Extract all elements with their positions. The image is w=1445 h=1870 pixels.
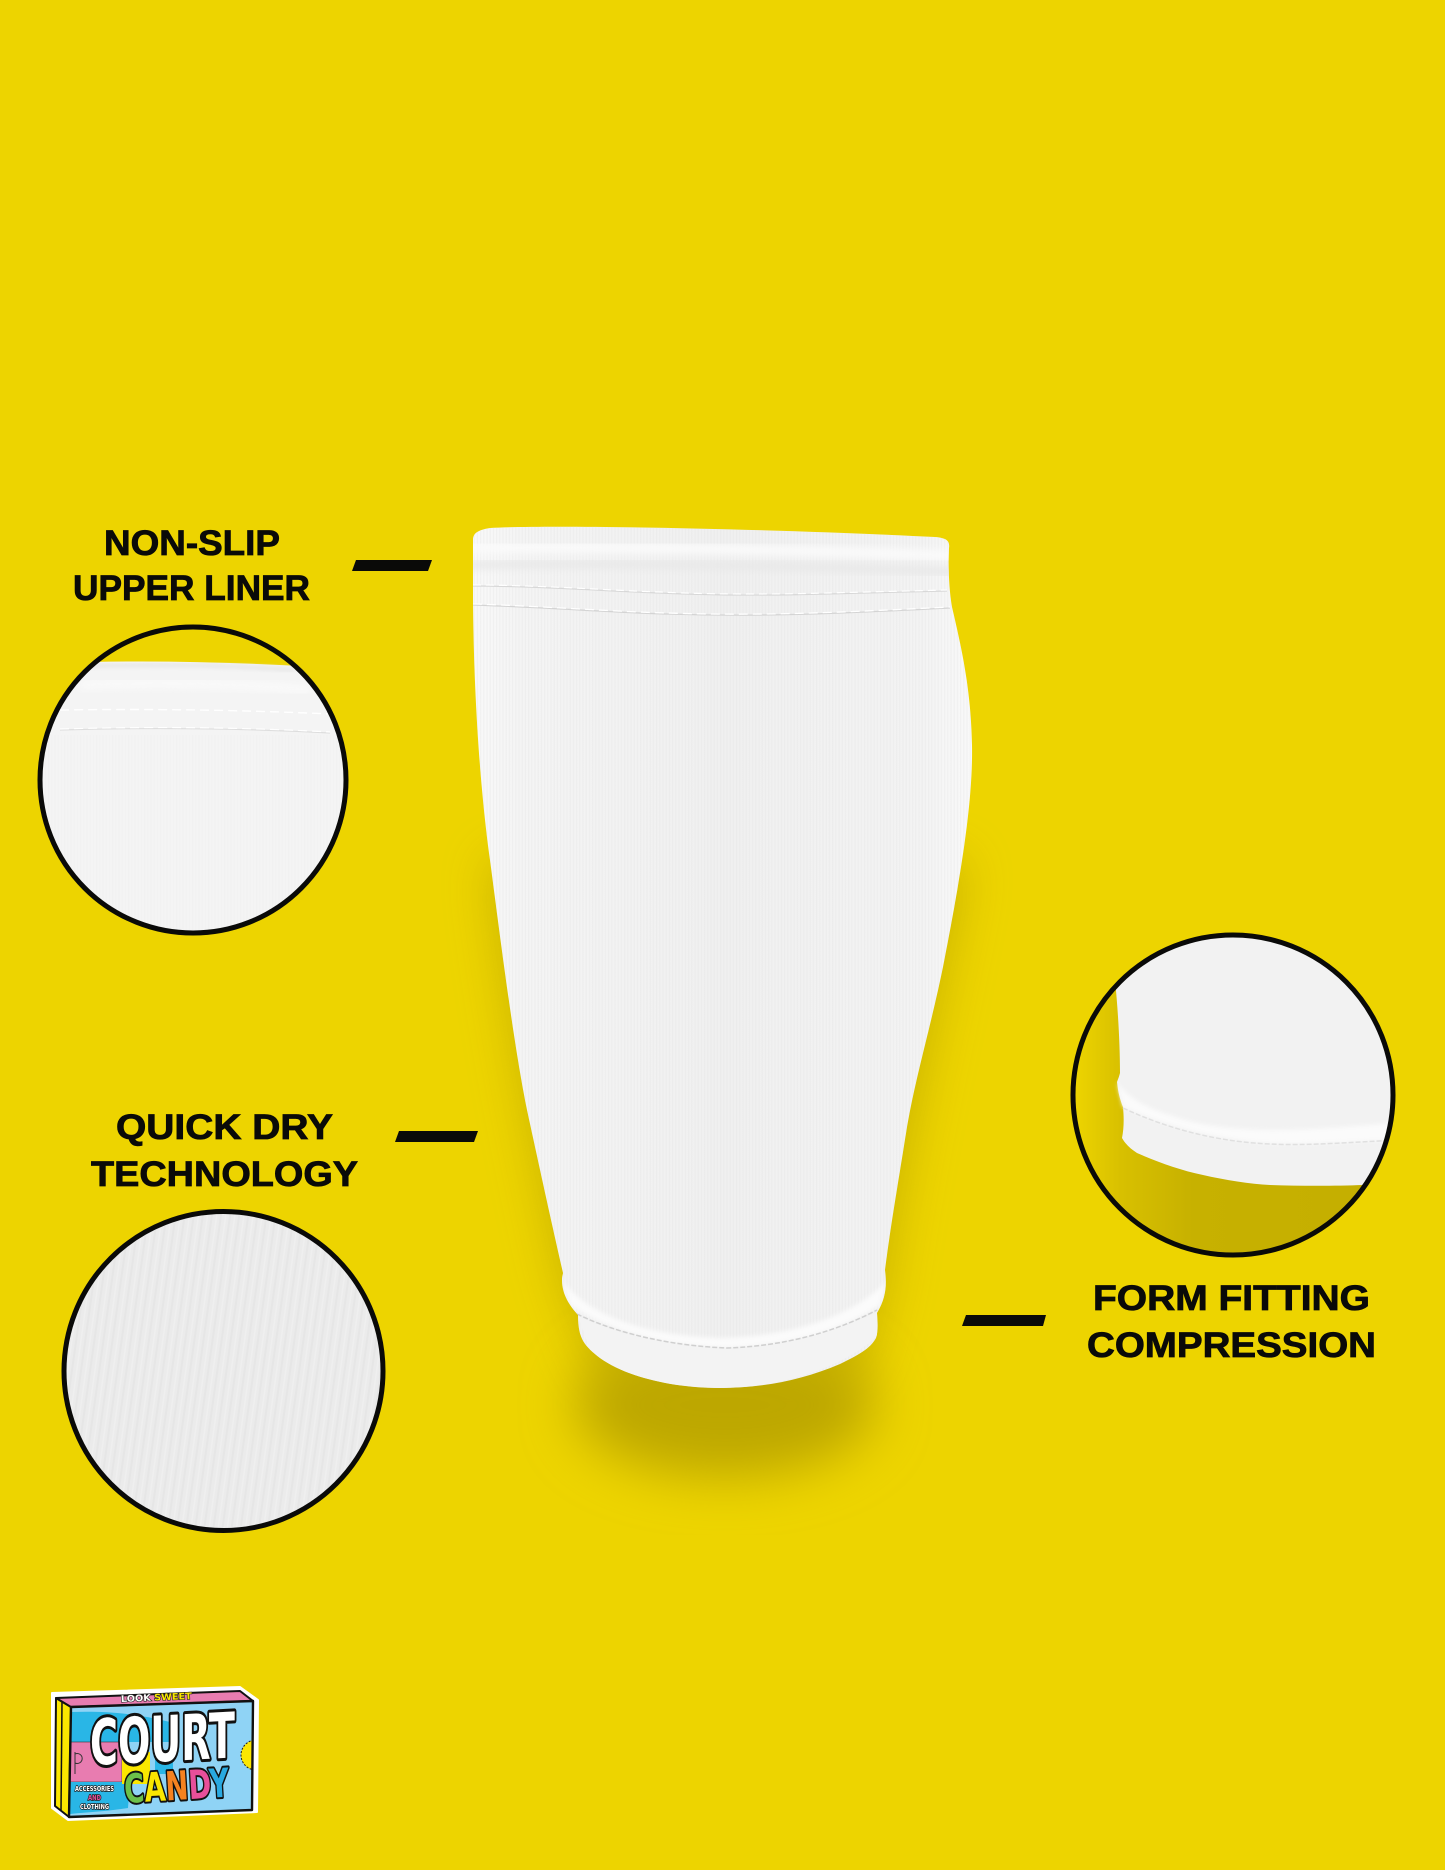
- box top: LOOK SWEET: [121, 1692, 193, 1705]
- logo word: candy: CANDY: [123, 1761, 231, 1813]
- logo small text: CLOTHING: [80, 1803, 109, 1811]
- leader dash: quick dry technology: [395, 1131, 478, 1142]
- sticker outline: [52, 1687, 258, 1820]
- leader dash: form fitting compression: [962, 1315, 1046, 1326]
- logo small text: AND: [88, 1794, 101, 1802]
- box side: [55, 1698, 71, 1817]
- stitching: [473, 585, 950, 615]
- label: non-slip upper liner: [73, 524, 310, 608]
- detail circle: form fitting compression: [1070, 930, 1400, 1260]
- box front: [69, 1701, 271, 1817]
- logo word: court: COURT: [90, 1698, 235, 1780]
- compression sleeve: [460, 520, 980, 1400]
- bottom hem: [562, 1280, 886, 1388]
- label: quick dry technology: [91, 1108, 358, 1194]
- label: quick dry technology: QUICK DRY: [116, 1108, 333, 1147]
- detail circle: non-slip upper liner: [30, 620, 360, 940]
- label: non-slip upper liner: UPPER LINER: [73, 569, 310, 608]
- label: quick dry technology: TECHNOLOGY: [91, 1155, 358, 1194]
- logo: court candy box: [52, 1687, 271, 1820]
- infographic canvas: [38, 526, 1396, 1821]
- box top: [56, 1691, 253, 1707]
- label: non-slip upper liner: NON-SLIP: [104, 524, 280, 563]
- leader dash: non-slip upper liner: [352, 560, 432, 571]
- label: form fitting compression: [1087, 1279, 1376, 1365]
- sleeve shadow: [490, 860, 965, 1477]
- label: form fitting compression: COMPRESSION: [1087, 1326, 1376, 1365]
- detail circle: quick dry technology: [64, 1212, 383, 1530]
- label: form fitting compression: FORM FITTING: [1093, 1279, 1370, 1318]
- logo small text: ACCESSORIES: [75, 1785, 114, 1793]
- logo small text: [75, 1785, 114, 1811]
